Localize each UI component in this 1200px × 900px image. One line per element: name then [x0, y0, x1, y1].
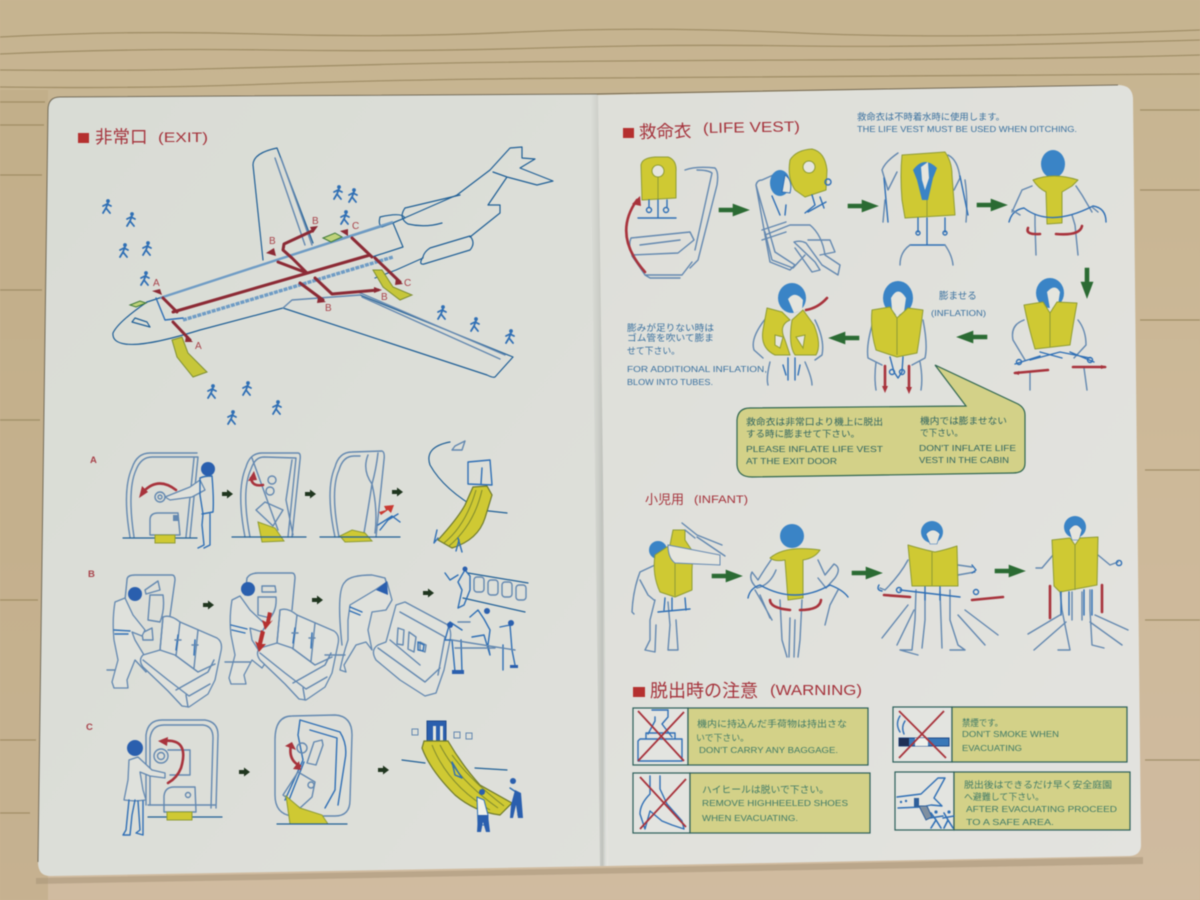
- panel: right page: [595, 85, 1141, 866]
- callout: inflate at exit door: AT THE EXIT DOOR: [746, 456, 837, 466]
- callout: inflate at exit door: DON'T INFLATE LIFE: [919, 443, 1017, 453]
- door type B sequence: [88, 566, 528, 707]
- card edge shadow: [38, 85, 1118, 862]
- warning: proceed to safe area: へ避難して下さい。: [964, 791, 1044, 802]
- step 1: vest from under seat: [626, 157, 718, 278]
- callout: inflate at exit door: 救命衣は非常口より機上に脱出: [746, 416, 883, 427]
- heading: life vest: (LIFE VEST): [703, 119, 800, 137]
- warning: proceed to safe area: [895, 772, 1130, 830]
- warning: proceed to safe area: AFTER EVACUATING PROCEED: [966, 804, 1117, 814]
- arrow: left: [829, 332, 859, 344]
- warning: baggage: DON'T CARRY ANY BAGGAGE.: [699, 745, 838, 755]
- note: additional inflation: BLOW INTO TUBES.: [627, 377, 713, 387]
- warning: no smoking: DON'T SMOKE WHEN: [962, 729, 1059, 739]
- door letters: A: [153, 278, 160, 289]
- heading: exit: 非常口: [95, 127, 148, 147]
- step B1: [107, 575, 222, 707]
- note: ditching: [857, 111, 1077, 134]
- step A1: [123, 453, 215, 548]
- door letters: C: [404, 278, 411, 289]
- door type A sequence: A: [90, 455, 97, 466]
- callout: inflate at exit door: [737, 365, 1025, 477]
- step B4 evacuating through overwing: [445, 566, 528, 674]
- door type B sequence: B: [88, 569, 95, 580]
- warning: high heels: REMOVE HIGHHEELED SHOES: [702, 798, 849, 808]
- green markers: [130, 233, 342, 307]
- door type C sequence: [86, 715, 523, 835]
- step 6: inflated vest: [868, 281, 926, 394]
- arrow: [848, 200, 878, 212]
- warning: no smoking: 禁煙です。: [962, 718, 1003, 728]
- arrow: [203, 600, 214, 610]
- centre fold: [590, 94, 608, 866]
- arrow: [378, 766, 389, 774]
- heading: infant: [645, 492, 748, 507]
- step A2: [232, 453, 306, 542]
- note: additional inflation: ゴム管を吹いて膨ま: [627, 332, 714, 343]
- door letters: B: [269, 236, 276, 247]
- warning: high heels: WHEN EVACUATING.: [702, 813, 798, 823]
- step C1: [123, 720, 222, 835]
- heading: life vest: [623, 119, 800, 142]
- warning: no smoking: [893, 707, 1127, 762]
- step 7: blowing into tubes: [753, 283, 827, 385]
- step C3 slide: [402, 721, 523, 832]
- door letters: C: [352, 221, 359, 232]
- heading: exit: [78, 127, 208, 147]
- aircraft diagram: [103, 147, 553, 424]
- warning: no smoking: EVACUATING: [962, 743, 1022, 753]
- heading: infant: 小児用: [645, 492, 684, 507]
- arrow: [222, 490, 233, 498]
- evacuating passengers: [103, 185, 514, 424]
- heading: life vest: 救命衣: [639, 121, 692, 142]
- step 2: seated passenger: [756, 149, 840, 275]
- label: inflation: [931, 290, 986, 318]
- arrow: [712, 570, 742, 582]
- note: additional inflation: 膨みが足りない時は: [627, 322, 714, 333]
- arrow: [977, 199, 1007, 211]
- step C2: [275, 715, 352, 824]
- warning: baggage: 機内に持込んだ手荷物は持出さな: [697, 718, 847, 729]
- callout: inflate at exit door: VEST IN THE CABIN: [919, 455, 1009, 465]
- infant step 1: [632, 523, 725, 652]
- slide: forward: [172, 337, 207, 377]
- note: additional inflation: せて下さい。: [627, 346, 680, 356]
- door letters: B: [312, 216, 319, 227]
- door type C sequence: C: [86, 722, 93, 733]
- door letters: B: [381, 292, 388, 303]
- infant step 4: [1028, 516, 1128, 650]
- step 4: back view strap: [1009, 150, 1106, 255]
- arrow: [995, 565, 1025, 577]
- icon: no smoking: [898, 711, 949, 758]
- step 3: over the head: [882, 152, 968, 265]
- warning: high heels: [633, 773, 870, 833]
- warning: proceed to safe area: TO A SAFE AREA.: [966, 817, 1054, 827]
- arrow: [423, 588, 434, 598]
- panel: left page: [38, 94, 607, 876]
- heading: warning: (WARNING): [770, 683, 862, 699]
- door letters: B: [325, 303, 332, 314]
- arrow: [392, 488, 403, 496]
- heading: infant: (INFANT): [694, 494, 748, 506]
- icon: no baggage: [638, 710, 684, 761]
- arrow: [312, 596, 323, 604]
- callout: inflate at exit door: 機内では膨ませない: [920, 415, 1007, 426]
- icon: no high heels: [640, 776, 686, 829]
- callout: inflate at exit door: で下さい。: [920, 428, 963, 438]
- arrow: [239, 768, 250, 776]
- label: inflation: 膨ませる: [939, 290, 977, 302]
- warning: high heels: ハイヒールは脱いで下さい。: [702, 784, 829, 796]
- arrow: down: [1081, 268, 1093, 298]
- warning: baggage: [633, 708, 868, 765]
- callout: inflate at exit door: する時に膨ませて下さい。: [746, 428, 860, 439]
- note: ditching: 救命衣は不時着水時に使用します。: [857, 111, 1005, 122]
- heading: exit: (EXIT): [158, 129, 208, 145]
- escape routes: [152, 226, 403, 342]
- step A3: [320, 451, 400, 542]
- arrow: [719, 204, 749, 216]
- arrow: [852, 567, 882, 579]
- step B2: [225, 573, 338, 700]
- arrow: left: [957, 331, 987, 343]
- infant step 3: [878, 521, 1003, 655]
- slide: rear: [373, 270, 412, 300]
- arrow: [305, 490, 316, 498]
- warning: proceed to safe area: 脱出後はできるだけ早く安全庭園: [964, 779, 1112, 790]
- heading: warning: 脱出時の注意: [650, 681, 758, 701]
- heading: warning: [633, 681, 862, 701]
- door letters: [153, 216, 411, 352]
- icon: plane and people running: [897, 778, 954, 828]
- step B3: [325, 575, 451, 696]
- note: ditching: THE LIFE VEST MUST BE USED WHEN DITCHING.: [857, 124, 1077, 134]
- warning: baggage: いで下さい。: [696, 733, 749, 743]
- door letters: A: [195, 341, 202, 352]
- step A4 slide: [429, 441, 507, 552]
- card shadow: [36, 857, 1143, 884]
- note: additional inflation: FOR ADDITIONAL INFLATION,: [627, 364, 767, 374]
- callout: inflate at exit door: PLEASE INFLATE LIFE VEST: [746, 444, 883, 454]
- step 5: pulling tabs: [1012, 278, 1107, 390]
- infant step 2: [748, 524, 848, 657]
- door type A sequence: [90, 441, 507, 552]
- note: additional inflation: [627, 322, 767, 387]
- label: inflation: (INFLATION): [931, 308, 986, 318]
